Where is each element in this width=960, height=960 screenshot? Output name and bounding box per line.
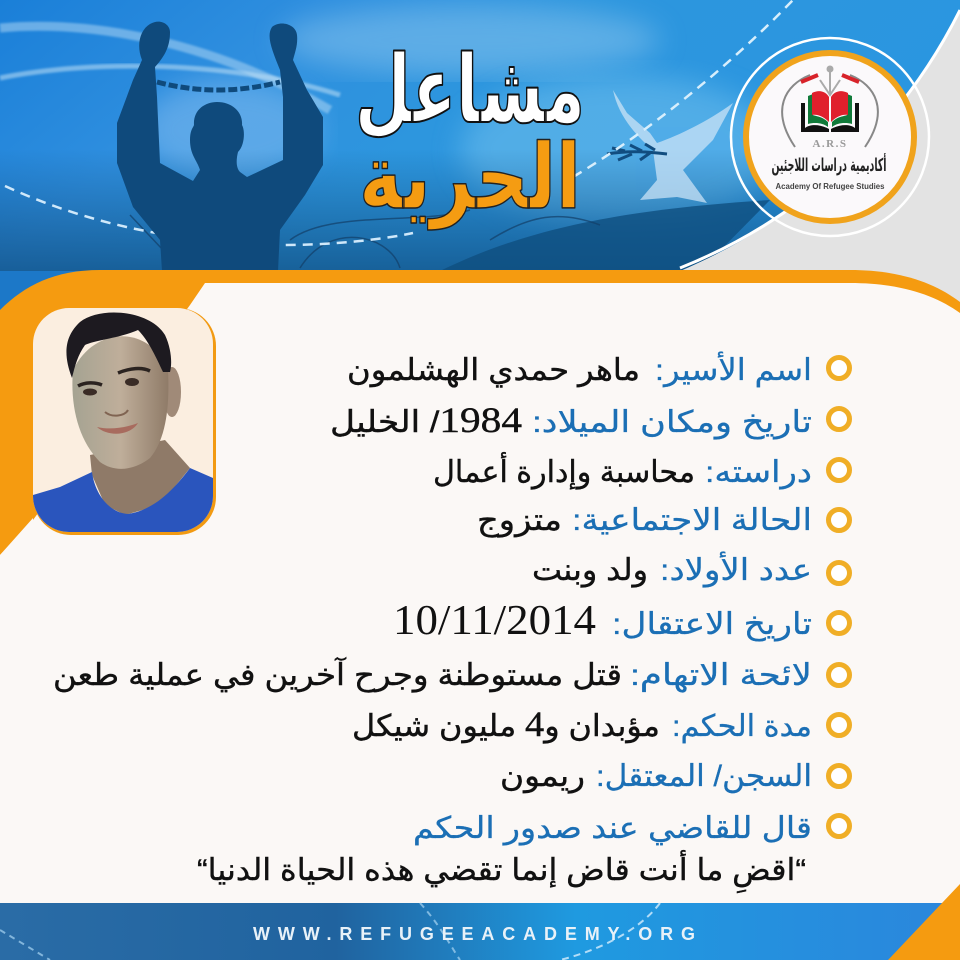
header edge line — [680, 10, 960, 268]
row: arrest date: 10/11/2014 — [393, 598, 596, 644]
row: marital status: الحالة الاجتماعية: — [572, 504, 812, 537]
row: charges: لائحة الاتهام: — [630, 659, 812, 693]
footer bar — [0, 884, 960, 960]
left white strip under diagonal — [0, 518, 33, 903]
prisoner photo — [33, 308, 216, 535]
logo — [731, 38, 929, 236]
eyes and brows — [78, 369, 150, 386]
row: arrest date: تاريخ الاعتقال: — [612, 608, 812, 642]
row: study: محاسبة وإدارة أعمال — [433, 451, 695, 490]
row: birth: 1984/ الخليل — [330, 400, 522, 440]
blue behind panel corner — [0, 260, 110, 320]
logo arcs — [782, 75, 878, 147]
ear — [167, 367, 181, 417]
row: prison — [500, 760, 850, 793]
handcuff chain — [157, 82, 280, 90]
row: prison: السجن/ المعتقل: — [596, 760, 812, 793]
row: study: دراسته: — [705, 456, 812, 489]
row: charges: قتل مستوطنة وجرح آخرين في عملية طعن — [53, 657, 622, 693]
row: arrest date — [393, 598, 850, 644]
neck — [90, 440, 190, 515]
title line 2: الحرية — [359, 125, 581, 230]
row: children — [532, 550, 850, 588]
row: prisoner name — [347, 350, 850, 388]
row: charges — [53, 657, 850, 693]
row: marital status — [477, 504, 850, 538]
logo english name: Academy Of Refugee Studies — [776, 182, 885, 191]
row: children: عدد الأولاد: — [660, 550, 812, 588]
dove — [613, 90, 733, 203]
title line 1: مشاعل — [355, 36, 585, 145]
face — [72, 336, 168, 469]
title — [355, 36, 585, 230]
quote: “اقضِ ما أنت قاض إنما تقضي هذه الحياة الدنيا“ — [197, 849, 806, 894]
row: study — [433, 451, 850, 490]
row: children: ولد وبنت — [532, 554, 648, 588]
info list — [53, 350, 850, 894]
logo book — [801, 103, 859, 132]
row: sentence — [352, 704, 850, 744]
prisoner silhouette — [117, 22, 323, 271]
olive branch — [607, 144, 667, 160]
row: prison: ريمون — [500, 760, 585, 793]
row: marital status: متزوج — [477, 504, 562, 538]
shirt — [33, 468, 213, 533]
row: prisoner name: ماهر حمدي الهشلمون — [347, 354, 640, 388]
website: WWW.REFUGEEACADEMY.ORG — [253, 924, 695, 944]
row: prisoner name: اسم الأسير: — [655, 350, 812, 388]
hair — [66, 312, 171, 378]
row: statement heading: قال للقاضي عند صدور الحكم — [413, 812, 812, 846]
dashed arcs — [5, 186, 413, 245]
main white panel — [0, 283, 960, 960]
row: birth — [330, 400, 850, 440]
nose and mouth — [97, 423, 138, 434]
row: sentence: مؤبدان و4 مليون شيكل — [352, 704, 660, 744]
logo letters: A.R.S — [812, 138, 848, 150]
orange corner — [888, 884, 960, 960]
barbed wire fence — [440, 200, 770, 271]
main panel orange frame — [0, 270, 960, 960]
grey header corner — [600, 0, 960, 320]
row: sentence: مدة الحكم: — [672, 710, 812, 744]
header banner — [0, 0, 960, 271]
row: birth: تاريخ ومكان الميلاد: — [532, 406, 812, 440]
